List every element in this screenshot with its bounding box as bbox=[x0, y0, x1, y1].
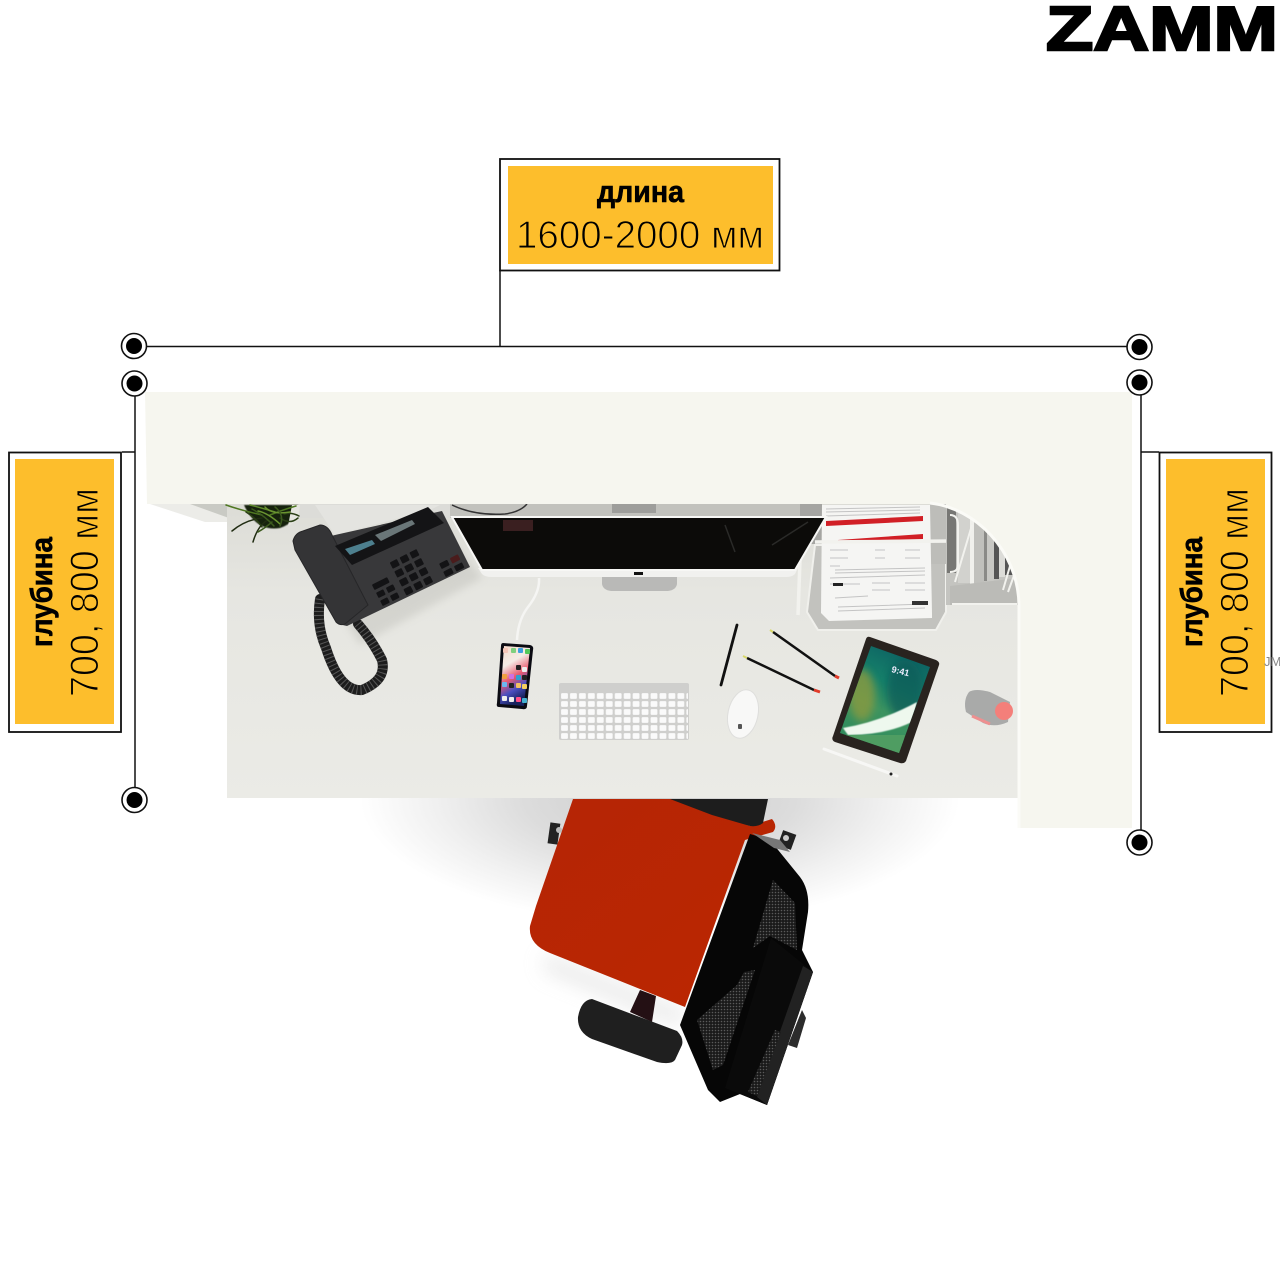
callout: left depth bbox=[9, 452, 121, 732]
arm post bbox=[630, 990, 656, 1022]
icon: desk telephone bbox=[293, 505, 482, 690]
chair back frame bbox=[680, 834, 813, 1105]
icon: tablet bbox=[832, 637, 939, 763]
dimension: length line bbox=[134, 270, 1139, 346]
monitor screen bbox=[452, 517, 826, 570]
telephone shadow bbox=[300, 525, 482, 645]
marker: top right bbox=[1127, 334, 1152, 360]
icon: pen bbox=[721, 625, 737, 685]
marker: left lower bbox=[122, 788, 147, 812]
telephone function keys bbox=[372, 554, 465, 606]
icon: file organizer bbox=[946, 503, 1021, 605]
icon: plant bbox=[226, 505, 300, 542]
monitor stand bbox=[602, 577, 677, 591]
rear armrest bbox=[578, 999, 682, 1063]
papers bbox=[821, 505, 932, 621]
chair casters bbox=[548, 822, 796, 850]
marker: top left bbox=[122, 334, 146, 358]
chair back mesh lower bbox=[697, 970, 755, 1070]
tray bar bbox=[798, 541, 955, 615]
lumbar pad bbox=[725, 938, 813, 1105]
icon: mouse bbox=[723, 687, 763, 741]
handset bbox=[293, 525, 368, 625]
desk curved edge bbox=[930, 503, 1019, 828]
icon: office chair bbox=[530, 799, 813, 1105]
icon: paper tray bbox=[798, 504, 955, 630]
floor shadow under desk bbox=[360, 672, 960, 1025]
icon: bottle bbox=[965, 690, 1013, 725]
callout: right depth bbox=[1160, 452, 1272, 732]
desk with equipment bbox=[145, 392, 1132, 1105]
callout: left depth: глубина bbox=[24, 536, 59, 647]
telephone keypad bbox=[390, 549, 433, 596]
marker: right upper bbox=[1127, 370, 1152, 395]
icon: stylus bbox=[824, 749, 897, 776]
front armrest bbox=[670, 799, 768, 826]
desk work surface bbox=[227, 504, 1020, 798]
icon: pencil two bbox=[743, 656, 820, 692]
icon: monitor bbox=[452, 517, 826, 591]
icon: smartphone with cable bbox=[497, 578, 539, 709]
marker: left upper bbox=[122, 371, 147, 396]
telephone base bbox=[297, 511, 470, 626]
tray mesh bbox=[807, 545, 946, 630]
callout: left depth: 700, 800 мм bbox=[63, 488, 107, 697]
back bracket bbox=[788, 1010, 806, 1048]
icon: pencil one bbox=[770, 630, 839, 678]
tablet wallpaper bbox=[843, 660, 923, 755]
callout: length: 1600-2000 мм bbox=[516, 214, 764, 257]
dimension: right depth line bbox=[1141, 382, 1159, 843]
callout: length: длина bbox=[597, 174, 685, 209]
telephone tray behind bbox=[315, 505, 440, 535]
desk top shelf and right return bbox=[145, 392, 1132, 828]
icon: keyboard bbox=[559, 683, 689, 740]
left shelf underside bbox=[150, 504, 300, 522]
coiled cord bbox=[319, 599, 383, 690]
monitor lower bezel bbox=[478, 568, 798, 577]
back gap behind monitor bbox=[300, 504, 800, 518]
chair back mesh upper bbox=[753, 880, 797, 950]
callout: length bbox=[500, 159, 780, 270]
chair seat bbox=[530, 799, 775, 1007]
dimension: left depth line bbox=[122, 383, 135, 800]
callout: right depth: глубина bbox=[1174, 536, 1209, 647]
callout: right depth: 700, 800 мм bbox=[1213, 488, 1257, 697]
marker: right lower bbox=[1127, 830, 1152, 855]
telephone screen bbox=[335, 507, 444, 565]
icon: tablet: 9:41 bbox=[891, 664, 910, 678]
